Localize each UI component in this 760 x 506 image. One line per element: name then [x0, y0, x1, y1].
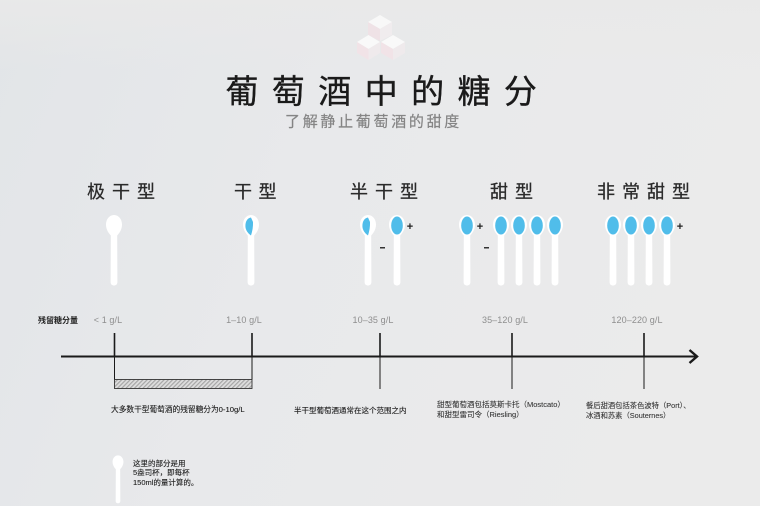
icon: five filled spoons: + [477, 221, 483, 233]
category: extra dry [87, 182, 162, 325]
legend note: 这里的部分是用 [133, 458, 186, 468]
title: 葡萄酒中的糖分 [226, 73, 550, 110]
icon: four filled spoons: + [677, 221, 683, 233]
note: sweet wines: 甜型葡萄酒包括莫斯卡托（Mostcato） [437, 399, 565, 409]
icon: five filled spoons [459, 215, 563, 286]
note: dry range: 大多数干型葡萄酒的残留糖分为0-10g/L [111, 404, 245, 414]
note: very sweet wines: 冰酒和苏素（Souternes） [586, 411, 670, 420]
note: off dry range: 半干型葡萄酒通常在这个范围之内 [294, 405, 406, 415]
note: sweet wines: 和甜型雷司令（Riesling） [437, 409, 524, 419]
axis label: 残留糖分量 [38, 315, 78, 325]
category: off dry [350, 182, 425, 325]
range: very sweet: 120–220 g/L [611, 315, 663, 325]
heading: off dry: 半干型 [350, 182, 425, 202]
timeline axis [61, 333, 697, 389]
heading: very sweet: 非常甜型 [597, 182, 697, 202]
range: sweet: 35–120 g/L [482, 315, 528, 325]
icon: partly filled spoon [243, 215, 259, 286]
icon: empty spoon [106, 215, 122, 286]
icon: spoons with plus and minus: + [407, 221, 413, 233]
category: dry [226, 182, 283, 325]
category: very sweet [597, 182, 697, 325]
heading: extra dry: 极干型 [87, 182, 162, 202]
subtitle: 了解静止葡萄酒的甜度 [285, 114, 462, 130]
hatched range bar [114, 380, 252, 388]
category: sweet [459, 182, 563, 325]
heading: dry: 干型 [234, 182, 283, 202]
legend note: 5盎司杯，即每杯 [133, 467, 190, 477]
heading: sweet: 甜型 [490, 182, 540, 202]
range: off dry: 10–35 g/L [353, 315, 393, 325]
icon: spoons with plus and minus [360, 215, 413, 286]
range: extra dry: < 1 g/L [94, 315, 122, 325]
range: dry: 1–10 g/L [226, 315, 262, 325]
note: very sweet wines: 餐后甜酒包括茶色波特（Port）、 [586, 401, 691, 410]
icon: sugar cubes [357, 15, 405, 60]
legend spoon [113, 455, 123, 503]
icon: four filled spoons [605, 215, 683, 286]
legend note: 150ml的量计算的。 [133, 477, 198, 487]
